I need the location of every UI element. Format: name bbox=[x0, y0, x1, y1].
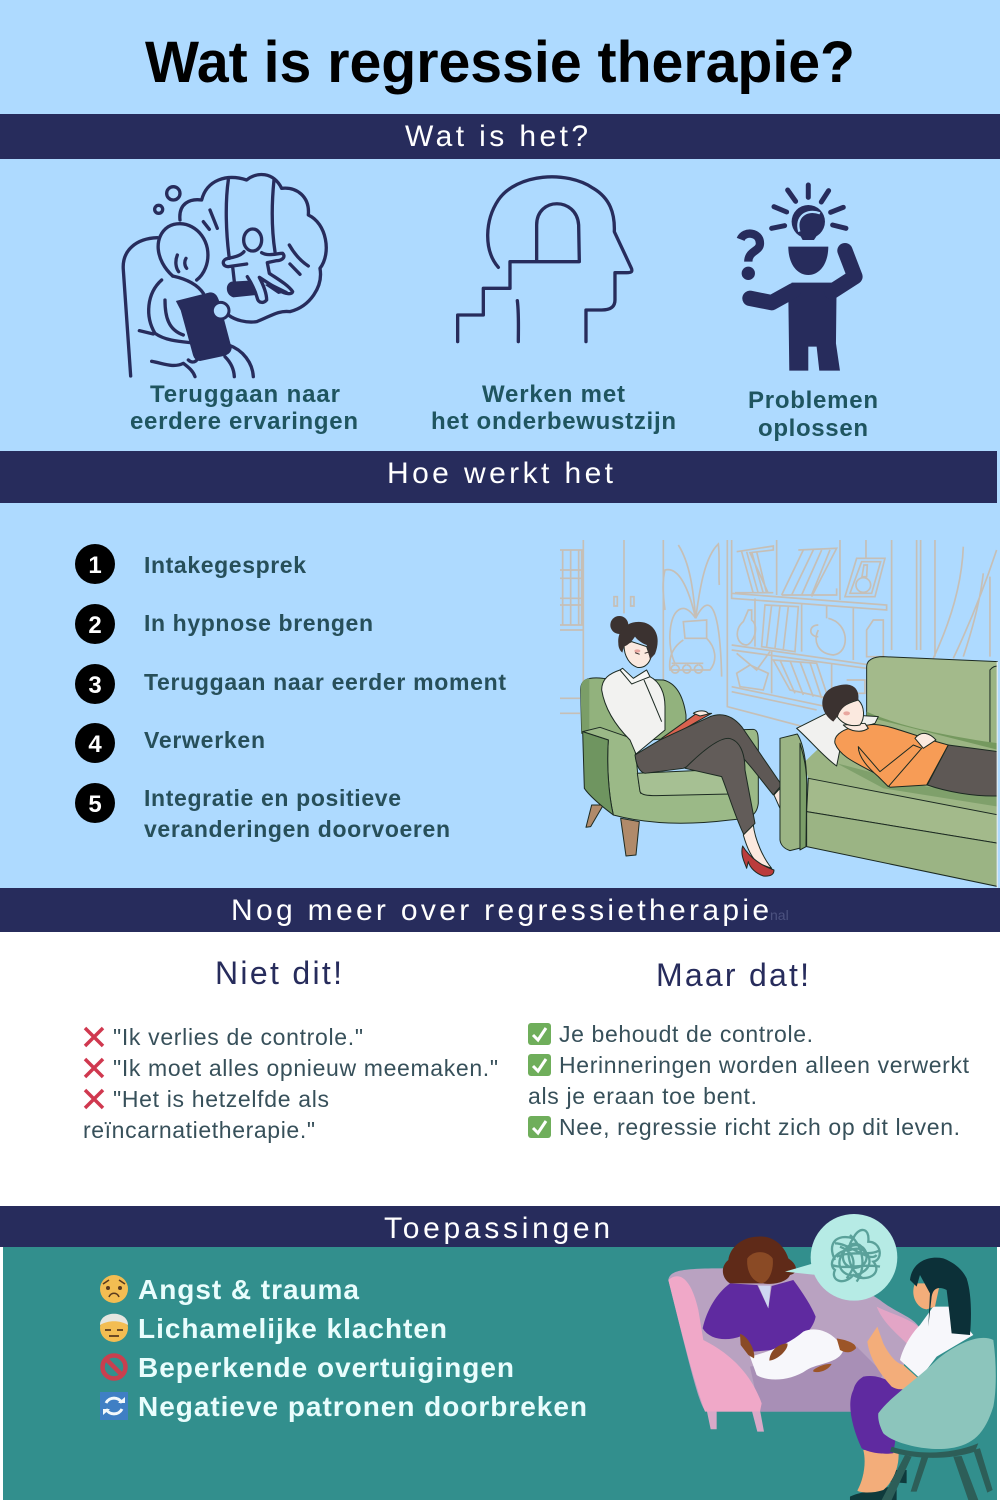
list: misconceptions bbox=[83, 1024, 498, 1143]
numbered steps bbox=[75, 544, 506, 842]
title: Wat is regressie therapie? bbox=[145, 30, 855, 95]
list: facts bbox=[528, 1021, 970, 1140]
icon: person with light bulb and question mark bbox=[741, 185, 855, 371]
heading: Niet dit!: Niet dit! bbox=[215, 955, 342, 991]
step 2 bbox=[75, 604, 373, 644]
list: facts: Herinneringen worden alleen verwerkt bbox=[559, 1052, 970, 1078]
step 5: veranderingen doorvoeren bbox=[144, 816, 450, 842]
list: applications: Beperkende overtuigingen bbox=[138, 1352, 514, 1383]
couch bbox=[780, 657, 998, 887]
list: misconceptions: "Het is hetzelfde als bbox=[113, 1086, 329, 1112]
label: Werken met het onderbewustzijn: Werken met bbox=[482, 381, 625, 408]
section band: Toepassingen: Toepassingen bbox=[384, 1212, 610, 1245]
icon: prohibited sign bbox=[102, 1356, 126, 1378]
step 3 bbox=[75, 664, 506, 704]
step 5: Integratie en positieve bbox=[144, 785, 401, 811]
list: applications bbox=[100, 1274, 587, 1422]
step 4: Verwerken bbox=[144, 727, 265, 753]
label: Werken met het onderbewustzijn bbox=[431, 381, 676, 435]
label: Problemen oplossen bbox=[748, 387, 878, 442]
step 5: 5 bbox=[88, 791, 102, 818]
step 2: In hypnose brengen bbox=[144, 610, 373, 636]
section band: Nog meer over regressietherapie: nal bbox=[770, 907, 789, 923]
step 3: Teruggaan naar eerder moment bbox=[144, 669, 506, 695]
icon: refresh arrows bbox=[100, 1392, 128, 1420]
pink couch bbox=[668, 1268, 920, 1432]
step 4: 4 bbox=[88, 731, 102, 758]
client lying down bbox=[797, 684, 998, 796]
step 5 bbox=[75, 783, 450, 842]
list: misconceptions: "Ik verlies de controle." bbox=[113, 1024, 363, 1050]
icon: person remembering childhood swing bbox=[123, 175, 326, 377]
list: applications: Lichamelijke klachten bbox=[138, 1313, 447, 1344]
icon: head with stairs and door bbox=[458, 177, 632, 342]
label: Teruggaan naar eerdere ervaringen: eerdere ervaringen bbox=[130, 408, 358, 435]
seated client bbox=[703, 1237, 856, 1379]
list: misconceptions: "Ik moet alles opnieuw meemaken." bbox=[113, 1055, 498, 1081]
step 3: 3 bbox=[88, 672, 102, 699]
section band: Wat is het?: Wat is het? bbox=[405, 120, 588, 153]
label: Problemen oplossen: Problemen bbox=[748, 387, 878, 414]
list: applications: Negatieve patronen doorbreken bbox=[138, 1391, 587, 1422]
icon: bandaged face bbox=[100, 1314, 128, 1342]
list: misconceptions: reïncarnatietherapie." bbox=[83, 1117, 315, 1143]
therapist bbox=[601, 616, 780, 877]
thought bubble bbox=[785, 1214, 897, 1301]
step 2: 2 bbox=[88, 612, 102, 639]
section band: Hoe werkt het: Hoe werkt het bbox=[387, 457, 614, 490]
icon: worried face bbox=[100, 1275, 128, 1303]
step 4 bbox=[75, 723, 265, 763]
section band: Wat is het? bbox=[0, 114, 1000, 159]
step 1: Intakegesprek bbox=[144, 552, 306, 578]
step 1 bbox=[75, 544, 306, 584]
therapist with chair bbox=[850, 1258, 996, 1500]
list: facts: Je behoudt de controle. bbox=[559, 1021, 813, 1047]
step 1: 1 bbox=[88, 552, 102, 579]
list: applications: Angst & trauma bbox=[138, 1274, 359, 1305]
heading: Maar dat!: Maar dat! bbox=[656, 957, 809, 993]
label: Teruggaan naar eerdere ervaringen: Teruggaan naar bbox=[150, 381, 340, 408]
section band: Hoe werkt het bbox=[0, 451, 997, 503]
illustration: client and therapist conversation bbox=[668, 1214, 996, 1500]
label: Problemen oplossen: oplossen bbox=[758, 415, 868, 442]
illustration: therapist and client on couch bbox=[560, 540, 999, 888]
armchair bbox=[581, 678, 758, 856]
label: Werken met het onderbewustzijn: het onderbewustzijn bbox=[431, 408, 676, 435]
list: facts: Nee, regressie richt zich op dit leven. bbox=[559, 1114, 960, 1140]
section band: Nog meer over regressietherapie: Nog meer over regressietherapie bbox=[231, 894, 769, 927]
label: Teruggaan naar eerdere ervaringen bbox=[130, 381, 358, 435]
section band: Toepassingen bbox=[0, 1206, 1000, 1247]
panel: toepassingen bbox=[3, 1247, 997, 1500]
list: facts: als je eraan toe bent. bbox=[528, 1083, 757, 1109]
section band: Nog meer over regressietherapie bbox=[0, 888, 1000, 932]
